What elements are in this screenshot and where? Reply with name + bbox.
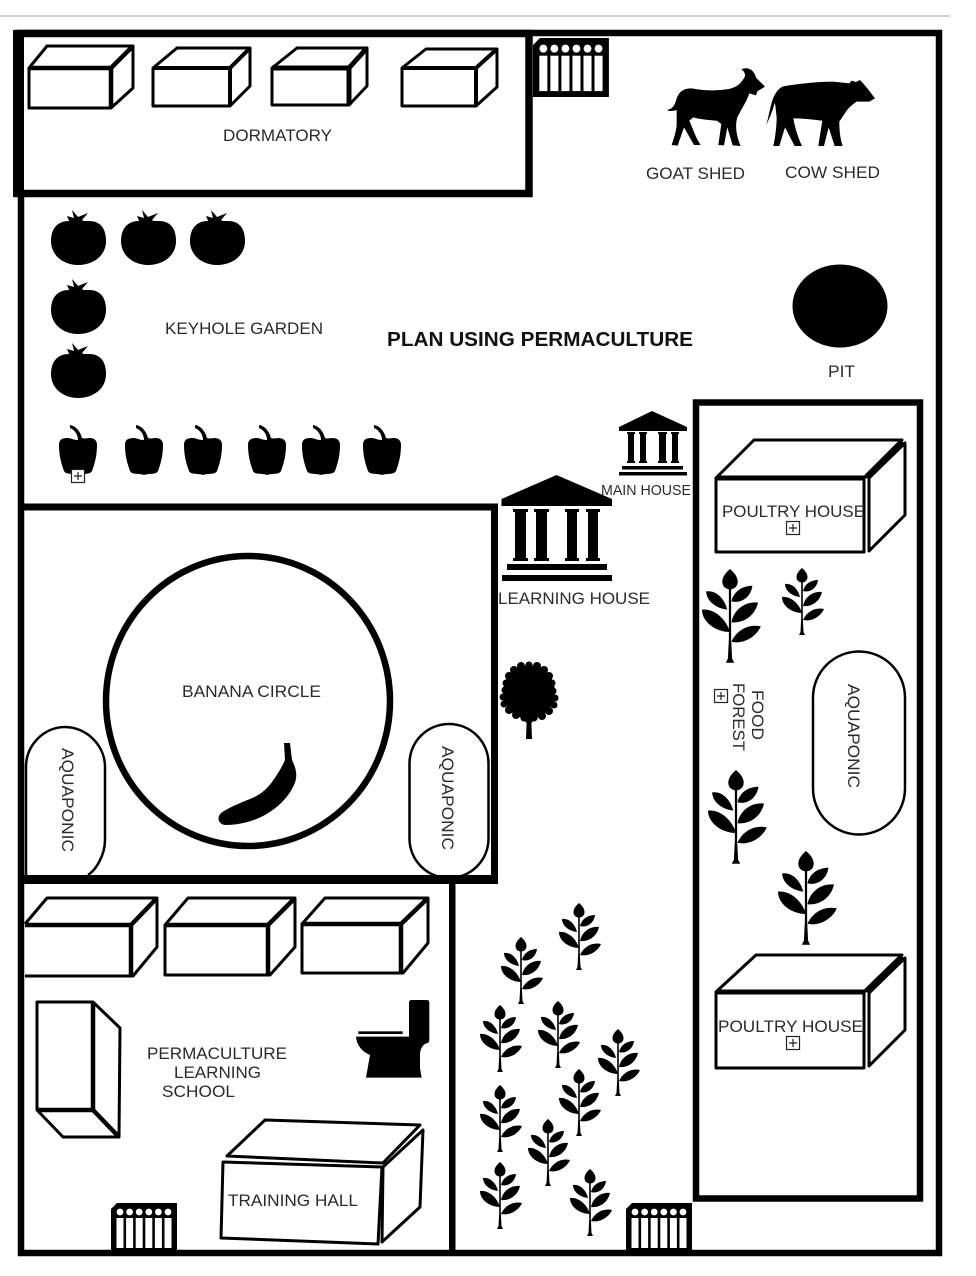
panel: food forest and poultry [696,402,920,1198]
training hall [221,1120,423,1244]
label: learning house: LEARNING HOUSE [498,589,650,608]
aquaponic left: AQUAPONIC [58,748,77,852]
panel: permaculture learning school [25,884,456,1253]
icon: cow [766,80,875,146]
icon: tree [500,662,558,739]
icon: toilet [356,1000,429,1078]
poultry house bottom [716,955,905,1068]
label: pit: PIT [828,362,855,381]
classroom box 1 [25,898,157,976]
aquaponic panel: AQUAPONIC [844,684,863,788]
icon: top gate [533,38,609,97]
label: main house: MAIN HOUSE [601,482,691,499]
panel: dormatory [13,30,529,197]
icon: learning house [502,475,612,581]
icon: plus marker [72,470,84,482]
icon: plus marker [714,690,728,702]
banana circle ring [106,556,390,846]
classroom box 3 [302,898,428,973]
pepper icons [59,425,401,475]
poultry house bottom: POULTRY HOUSE [718,1017,863,1036]
icon: main house [619,411,687,476]
label: permaculture learning school: PERMACULTURE [147,1044,287,1063]
icon: banana [219,743,296,825]
side building box [37,1002,120,1137]
label: permaculture learning school [147,1044,287,1101]
label: cow shed: COW SHED [785,163,880,182]
classroom box 2 [165,898,295,975]
icon: pit [792,264,888,348]
poultry house top: POULTRY HOUSE [722,502,865,521]
label: keyhole garden: KEYHOLE GARDEN [165,319,323,338]
tomato icons [51,210,245,398]
icon: plus marker [786,1036,800,1050]
label: permaculture learning school: SCHOOL [162,1082,235,1101]
aquaponic panel [813,652,905,834]
dormitory box 1 [29,46,133,108]
poultry house top [716,440,905,552]
aquaponic right [405,724,493,884]
aquaponic right: AQUAPONIC [438,746,457,850]
label: permaculture learning school: LEARNING [174,1063,261,1082]
label: dormatory: DORMATORY [223,126,332,145]
large plant [702,569,761,663]
large plant [708,770,767,864]
title: PLAN USING PERMACULTURE [387,329,693,351]
icon: bottom gate [626,1203,692,1253]
label: food forest [729,683,767,751]
panel: banana circle [18,507,498,884]
dormitory box 3 [272,48,367,105]
dormitory box 2 [153,48,250,106]
label: food forest: FOREST [729,683,748,751]
label: banana circle: BANANA CIRCLE [182,682,321,701]
orchard plants [480,903,640,1236]
icon: plus marker [786,522,800,534]
icon: goat [667,68,765,146]
panel: keyhole garden [51,210,401,475]
label: food forest: FOOD [748,690,767,740]
aquaponic left [26,727,105,875]
training hall: TRAINING HALL [228,1191,358,1210]
small plant [782,568,824,635]
label: goat shed: GOAT SHED [646,164,745,183]
icon: school gate [111,1203,177,1253]
dormitory box 4 [402,49,497,106]
large plant [778,851,837,945]
